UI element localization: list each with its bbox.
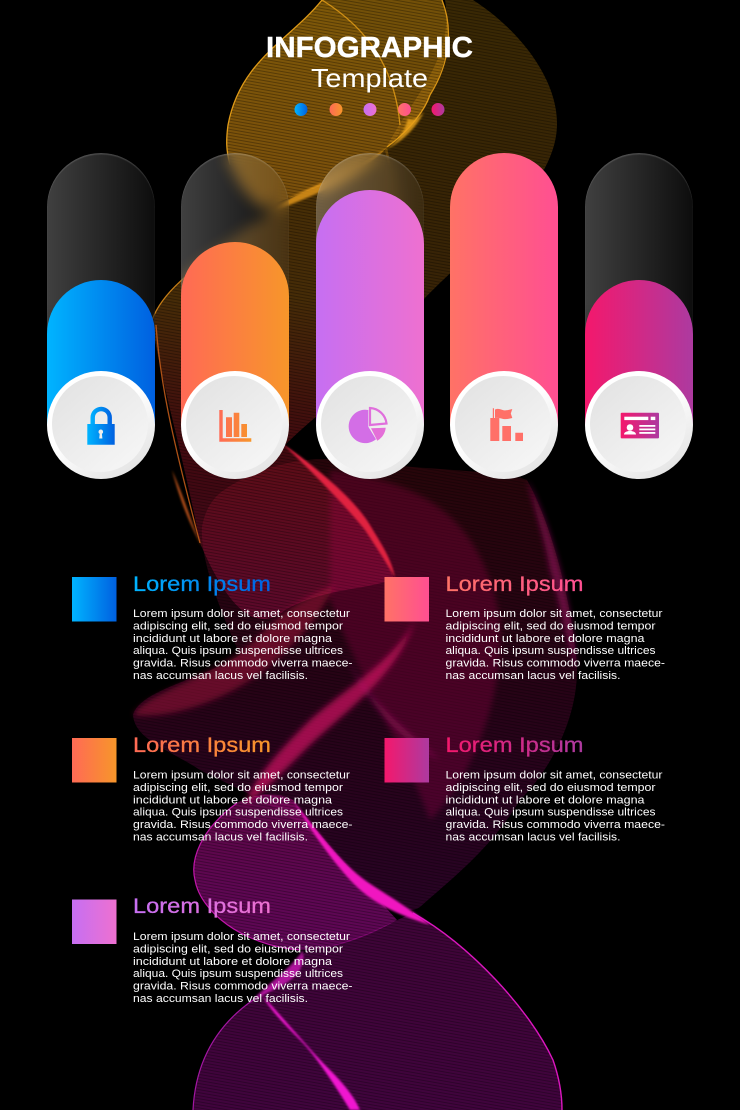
swatch: [72, 738, 116, 782]
icon: padlock: [87, 407, 115, 445]
body text: gravida. Risus commodo viverra maece-: [133, 981, 353, 993]
panel: glass bar 3: [316, 153, 424, 425]
bar fill: blue: [47, 280, 155, 425]
body text: Lorem ipsum dolor sit amet, consectetur: [133, 608, 350, 620]
body text: nas accumsan lacus vel facilisis.: [133, 832, 308, 844]
body text: gravida. Risus commodo viverra maece-: [133, 819, 353, 831]
bar fill: violet: [316, 190, 424, 425]
panel: item 2 (orange): [72, 733, 353, 844]
body text: aliqua. Quis ipsum suspendisse ultrices: [446, 807, 656, 819]
bar fill: magenta: [585, 280, 693, 425]
body text: incididunt ut labore et dolore magna: [133, 794, 333, 806]
body text: Lorem ipsum dolor sit amet, consectetur: [446, 770, 663, 782]
icon: flag on descending bars: [490, 408, 523, 441]
body text: Lorem ipsum dolor sit amet, consectetur: [446, 608, 663, 620]
body text: incididunt ut labore et dolore magna: [133, 633, 333, 645]
title: INFOGRAPHIC: [266, 32, 473, 64]
decorative colour dots: [294, 103, 444, 116]
bar fill: coral pink: [450, 153, 558, 425]
panel: item 5 (magenta): [384, 733, 665, 844]
panel: glass bar 5: [585, 153, 693, 425]
heading: Lorem Ipsum: [133, 572, 271, 596]
body text: [133, 931, 353, 1005]
body text: incididunt ut labore et dolore magna: [446, 794, 645, 806]
title: Template: [311, 63, 428, 93]
body text: aliqua. Quis ipsum suspendisse ultrices: [133, 645, 344, 657]
body text: adipiscing elit, sed do eiusmod tempor: [133, 782, 343, 794]
soft glowing ribbons: [133, 470, 577, 820]
icon disc 1: [47, 371, 155, 479]
panel: item 3 (violet): [72, 894, 353, 1005]
body text: incididunt ut labore et dolore magna: [133, 956, 333, 968]
body text: aliqua. Quis ipsum suspendisse ultrices: [133, 968, 344, 980]
icon disc 5: [585, 371, 693, 479]
body text: gravida. Risus commodo viverra maece-: [446, 658, 665, 670]
panel: item 4 (coral pink): [384, 572, 665, 682]
icon: ID card: [621, 413, 659, 438]
body text: [446, 770, 665, 844]
swatch: [384, 577, 429, 622]
swatch: [384, 738, 429, 782]
bar fill: orange: [181, 242, 289, 425]
body text: [133, 770, 353, 844]
body text: nas accumsan lacus vel facilisis.: [446, 670, 620, 682]
heading: Lorem Ipsum: [133, 894, 271, 918]
icon disc 2: [181, 371, 289, 479]
icon disc 4: [450, 371, 558, 479]
icon: pie chart: [349, 408, 386, 443]
body text: nas accumsan lacus vel facilisis.: [133, 993, 308, 1005]
body text: nas accumsan lacus vel facilisis.: [133, 670, 308, 682]
title: [266, 32, 473, 93]
icon: bar chart: [219, 410, 251, 442]
body text: incididunt ut labore et dolore magna: [446, 633, 645, 645]
body text: adipiscing elit, sed do eiusmod tempor: [133, 620, 343, 632]
heading: Lorem Ipsum: [446, 733, 584, 757]
body text: adipiscing elit, sed do eiusmod tempor: [133, 943, 343, 955]
body text: aliqua. Quis ipsum suspendisse ultrices: [133, 807, 344, 819]
body text: Lorem ipsum dolor sit amet, consectetur: [133, 931, 350, 943]
heading: Lorem Ipsum: [446, 572, 584, 596]
swatch: [72, 900, 116, 944]
heading: Lorem Ipsum: [133, 733, 271, 757]
body text: aliqua. Quis ipsum suspendisse ultrices: [446, 645, 656, 657]
body text: gravida. Risus commodo viverra maece-: [446, 819, 665, 831]
body text: nas accumsan lacus vel facilisis.: [446, 832, 620, 844]
body text: [133, 608, 353, 682]
body text: adipiscing elit, sed do eiusmod tempor: [446, 782, 656, 794]
body text: Lorem ipsum dolor sit amet, consectetur: [133, 770, 350, 782]
panel: glass bar 2: [181, 153, 289, 425]
swatch: [72, 577, 116, 622]
icon disc 3: [316, 371, 424, 479]
body text: gravida. Risus commodo viverra maece-: [133, 658, 353, 670]
panel: item 1 (blue): [72, 572, 353, 682]
panel: glass bar 1: [47, 153, 155, 425]
body text: adipiscing elit, sed do eiusmod tempor: [446, 620, 656, 632]
body text: [446, 608, 665, 682]
